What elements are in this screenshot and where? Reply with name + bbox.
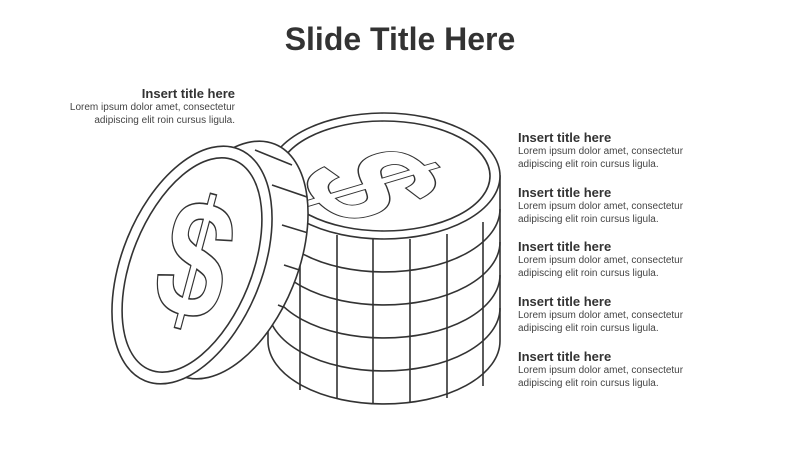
text block: right 3 [518,239,683,279]
text block: right 1: Lorem ipsum dolor amet, consectetur [518,146,683,157]
dollar on stack top: $ [254,131,488,238]
illustration: coins [111,112,501,405]
text block: right 5: Insert title here [518,349,611,364]
text block: right 3: Lorem ipsum dolor amet, consectetur [518,255,683,266]
text block: right 1 [518,130,683,170]
title: Slide Title Here [285,21,515,57]
text block: left: adipiscing elit roin cursus ligula. [94,115,235,126]
text block: right 4: Insert title here [518,294,611,309]
text block: right 5: adipiscing elit roin cursus ligula. [518,378,659,389]
text block: left: Insert title here [142,86,235,101]
text block: right 4: Lorem ipsum dolor amet, consectetur [518,310,683,321]
dollar on leaning coin: $ [138,160,253,360]
coin stack [254,113,500,404]
text block: left: Lorem ipsum dolor amet, consectetur [70,102,235,113]
text block: right 1: adipiscing elit roin cursus ligula. [518,159,659,170]
text block: right 2: Lorem ipsum dolor amet, consectetur [518,201,683,212]
text block: right 5: Lorem ipsum dolor amet, consectetur [518,365,683,376]
text block: right 2: Insert title here [518,185,611,200]
text block: right 2: adipiscing elit roin cursus ligula. [518,214,659,225]
text block: right 1: Insert title here [518,130,611,145]
text block: right 5 [518,349,683,389]
text block: right 4 [518,294,683,334]
text block: right 2 [518,185,683,225]
text block: right 3: adipiscing elit roin cursus ligula. [518,268,659,279]
text block: left [70,86,235,126]
text block: right 4: adipiscing elit roin cursus ligula. [518,323,659,334]
text block: right 3: Insert title here [518,239,611,254]
leaning coin [111,140,309,385]
